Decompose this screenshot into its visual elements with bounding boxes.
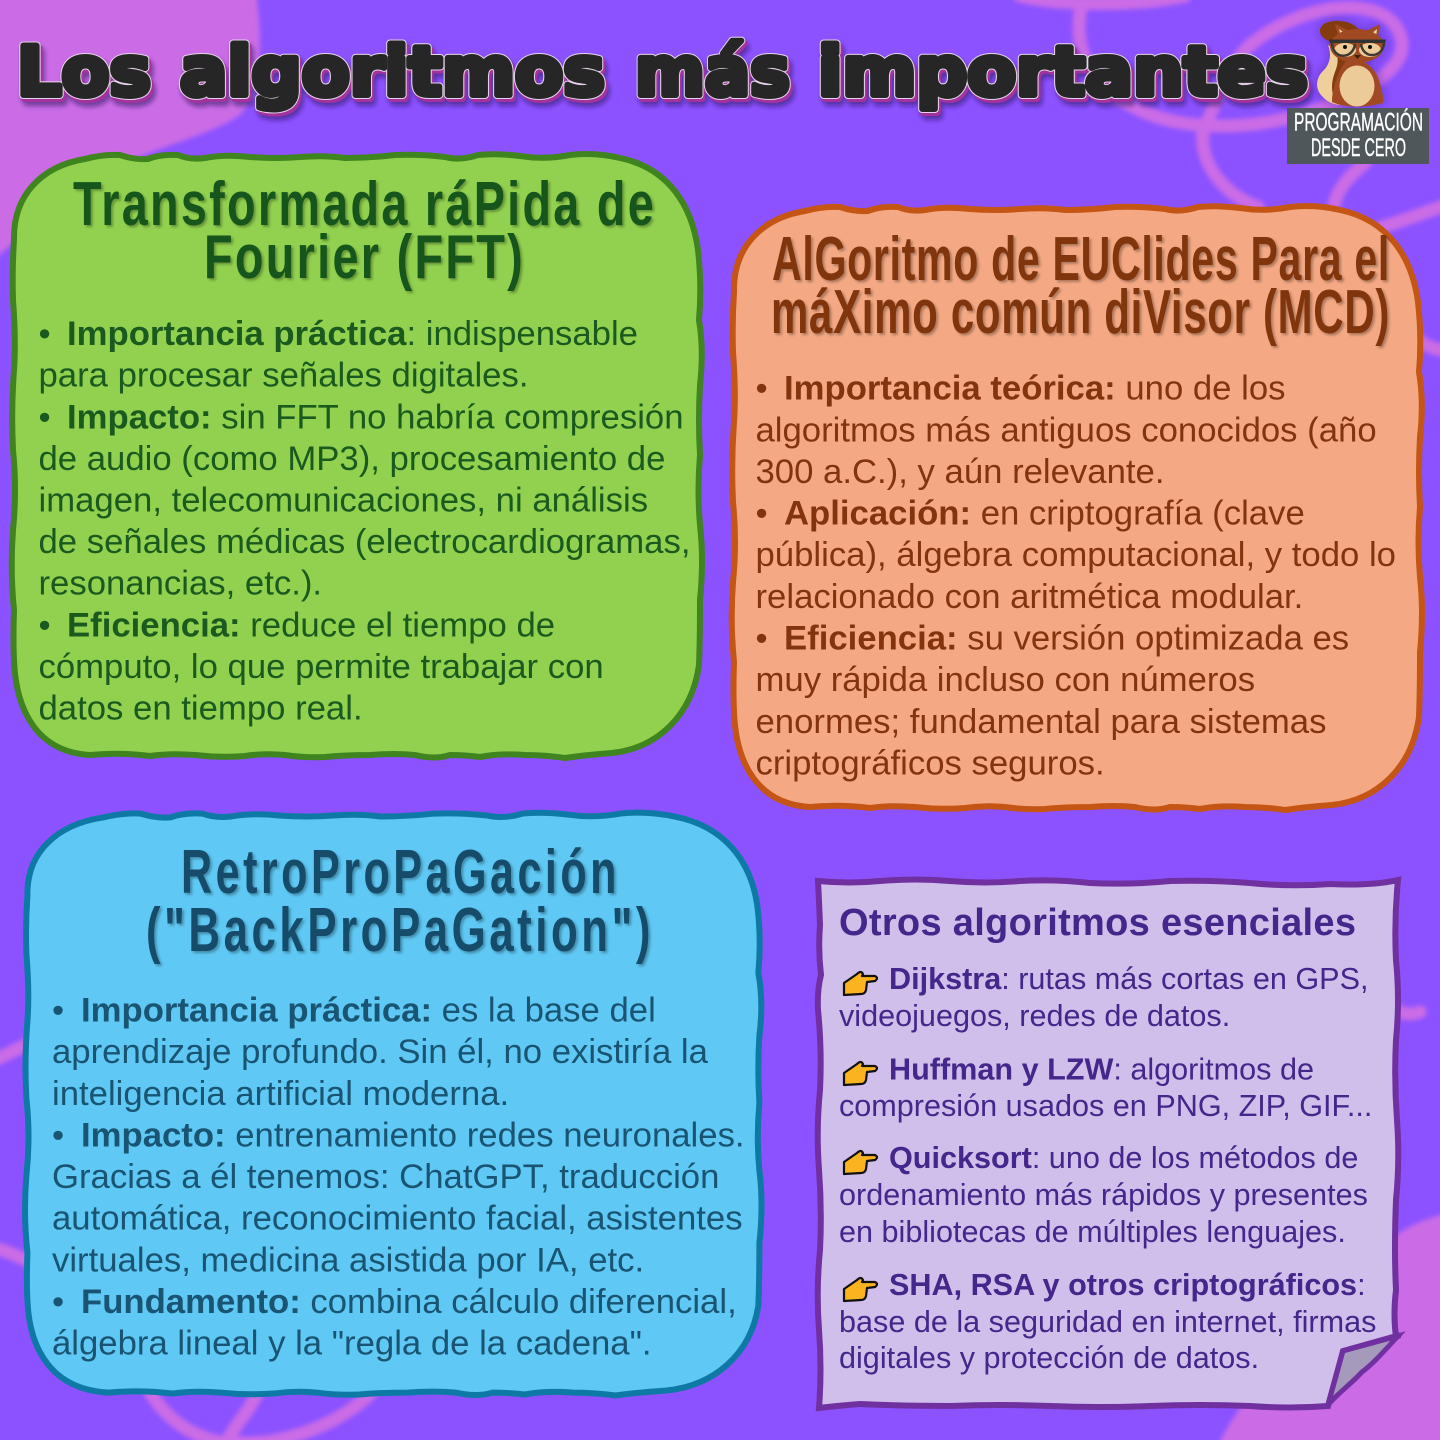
- text: Euclides bullets: 300 a.C.), y aún relevante.: [756, 453, 1164, 491]
- text: FFT bullets: de señales médicas (electrocardiogramas,: [38, 523, 690, 561]
- text: FFT bullets: datos en tiempo real.: [38, 690, 363, 728]
- text: FFT bullets: cómputo, lo que permite trabajar con: [38, 648, 604, 686]
- text: Retropropagación bullets: es la base del: [442, 991, 656, 1029]
- text: Euclides bullets: algoritmos más antiguos conocidos (año: [756, 411, 1377, 449]
- title: importantes: [820, 36, 1310, 115]
- text: Euclides bullets: [756, 369, 1396, 783]
- title: Los: [17, 33, 151, 112]
- text: Retropropagación bullets: aprendizaje profundo. Sin él, no existiría la: [52, 1033, 709, 1071]
- heading: FFT: Transformada ráPida de: [73, 170, 656, 239]
- text: Retropropagación bullets: virtuales, medicina asistida por IA, etc.: [52, 1242, 644, 1280]
- text: Retropropagación bullets: combina cálculo diferencial,: [310, 1283, 737, 1321]
- text: FFT bullets: •: [38, 398, 51, 436]
- item: SHA RSA: base de la seguridad en internet, firmas: [839, 1305, 1376, 1339]
- item: Quicksort: [839, 1141, 1368, 1249]
- heading: Retropropagación: RetroProPaGación: [181, 838, 620, 907]
- panel shape: Euclides: [732, 206, 1422, 810]
- title: algoritmos: [182, 36, 607, 115]
- heading: FFT: [73, 170, 656, 292]
- note sheet: [818, 880, 1400, 1408]
- title: importantes: [818, 33, 1308, 112]
- text: Euclides bullets: pública), álgebra computacional, y todo lo: [756, 536, 1396, 574]
- heading: Euclides: [771, 225, 1390, 347]
- text: FFT bullets: imagen, telecomunicaciones, ni análisis: [38, 482, 648, 520]
- text: Euclides bullets: en criptografía (clave: [981, 494, 1305, 532]
- text: Retropropagación bullets: •: [52, 1116, 64, 1154]
- text: FFT bullets: Impacto:: [67, 398, 212, 436]
- text: FFT bullets: Eficiencia:: [67, 606, 241, 644]
- text: Retropropagación bullets: [52, 991, 745, 1363]
- text: Retropropagación bullets: Gracias a él tenemos: ChatGPT, traducción: [52, 1158, 719, 1196]
- panel: FFT: [12, 154, 702, 758]
- text: Euclides bullets: su versión optimizada es: [967, 620, 1349, 658]
- text: Retropropagación bullets: •: [52, 991, 64, 1029]
- title: algoritmos: [180, 33, 605, 112]
- text: Euclides bullets: Importancia teórica:: [784, 369, 1116, 407]
- text: Euclides bullets: •: [756, 494, 768, 532]
- heading: Otros algoritmos: Otros algoritmos esenciales: [839, 902, 1356, 944]
- item: Quicksort: Quicksort: uno de los métodos de: [889, 1141, 1358, 1175]
- title: más: [637, 36, 792, 115]
- panel: Retropropagación: [25, 813, 762, 1395]
- text: Euclides bullets: relacionado con aritmética modular.: [756, 578, 1303, 616]
- item: SHA RSA: SHA, RSA y otros criptográficos:: [889, 1268, 1366, 1302]
- panel shape: Retropropagación: [25, 813, 762, 1395]
- text: FFT bullets: reduce el tiempo de: [250, 606, 555, 644]
- text: Euclides bullets: Eficiencia:: [784, 620, 958, 658]
- text: Euclides bullets: •: [756, 620, 768, 658]
- text: Retropropagación bullets: álgebra lineal y la "regla de la cadena".: [52, 1325, 652, 1363]
- title: más: [635, 33, 790, 112]
- item: Quicksort: en bibliotecas de múltiples lenguajes.: [839, 1215, 1346, 1249]
- text: Retropropagación bullets: •: [52, 1283, 64, 1321]
- text: Retropropagación bullets: automática, reconocimiento facial, asistentes: [52, 1200, 743, 1238]
- text: FFT bullets: para procesar señales digitales.: [38, 357, 528, 395]
- item: Huffman: Huffman y LZW: algoritmos de: [889, 1052, 1314, 1086]
- item: Dijkstra: videojuegos, redes de datos.: [839, 999, 1230, 1033]
- text: Euclides bullets: enormes; fundamental para sistemas: [756, 703, 1326, 741]
- title: más: [635, 33, 790, 112]
- text: FFT bullets: [38, 315, 690, 728]
- panel: Otros algoritmos: [818, 880, 1400, 1408]
- text: FFT bullets: •: [38, 606, 51, 644]
- page curl: [1328, 1336, 1398, 1405]
- text: FFT bullets: resonancias, etc.).: [38, 565, 322, 603]
- heading: Retropropagación: [146, 838, 654, 965]
- item: Huffman: [839, 1052, 1372, 1123]
- text: Euclides bullets: muy rápida incluso con números: [756, 661, 1255, 699]
- title: importantes: [818, 33, 1308, 112]
- text: Euclides bullets: uno de los: [1125, 369, 1286, 407]
- item: Dijkstra: Dijkstra: rutas más cortas en GPS,: [889, 962, 1368, 996]
- text: Retropropagación bullets: Fundamento:: [81, 1283, 301, 1321]
- text: Retropropagación bullets: Importancia práctica:: [81, 991, 432, 1029]
- title: Los: [17, 33, 151, 112]
- heading: Euclides: AlGoritmo de EUClides Para el: [772, 225, 1390, 294]
- item: Dijkstra: [839, 962, 1368, 1033]
- panel: Euclides: [732, 206, 1422, 810]
- title: Los: [19, 36, 153, 115]
- item: SHA RSA: digitales y protección de datos.: [839, 1341, 1259, 1375]
- item: Huffman: compresión usados en PNG, ZIP, GIF...: [839, 1089, 1372, 1123]
- title: algoritmos: [180, 33, 605, 112]
- text: Retropropagación bullets: Impacto:: [81, 1116, 226, 1154]
- brand badge: [1287, 108, 1429, 164]
- text: Retropropagación bullets: entrenamiento redes neuronales.: [235, 1116, 745, 1154]
- text: FFT bullets: •: [38, 315, 51, 353]
- text: Euclides bullets: •: [756, 369, 768, 407]
- text: Euclides bullets: Aplicación:: [784, 494, 971, 532]
- panel shape: FFT: [12, 154, 702, 758]
- heading: FFT: Fourier (FFT): [204, 223, 525, 292]
- icon: squirrel mascot: [1317, 21, 1386, 107]
- item: Quicksort: ordenamiento más rápidos y presentes: [839, 1178, 1368, 1212]
- item: SHA RSA: [839, 1268, 1376, 1375]
- text: Euclides bullets: criptográficos seguros.: [756, 745, 1105, 783]
- text: FFT bullets: Importancia práctica: [67, 315, 407, 353]
- text: FFT bullets: de audio (como MP3), procesamiento de: [38, 440, 665, 478]
- text: FFT bullets: : indispensable: [406, 315, 638, 353]
- heading: Retropropagación: ("BackProPaGation"): [146, 896, 654, 965]
- text: FFT bullets: sin FFT no habría compresión: [221, 398, 684, 436]
- title: [17, 33, 1310, 115]
- text: Retropropagación bullets: inteligencia artificial moderna.: [52, 1075, 509, 1113]
